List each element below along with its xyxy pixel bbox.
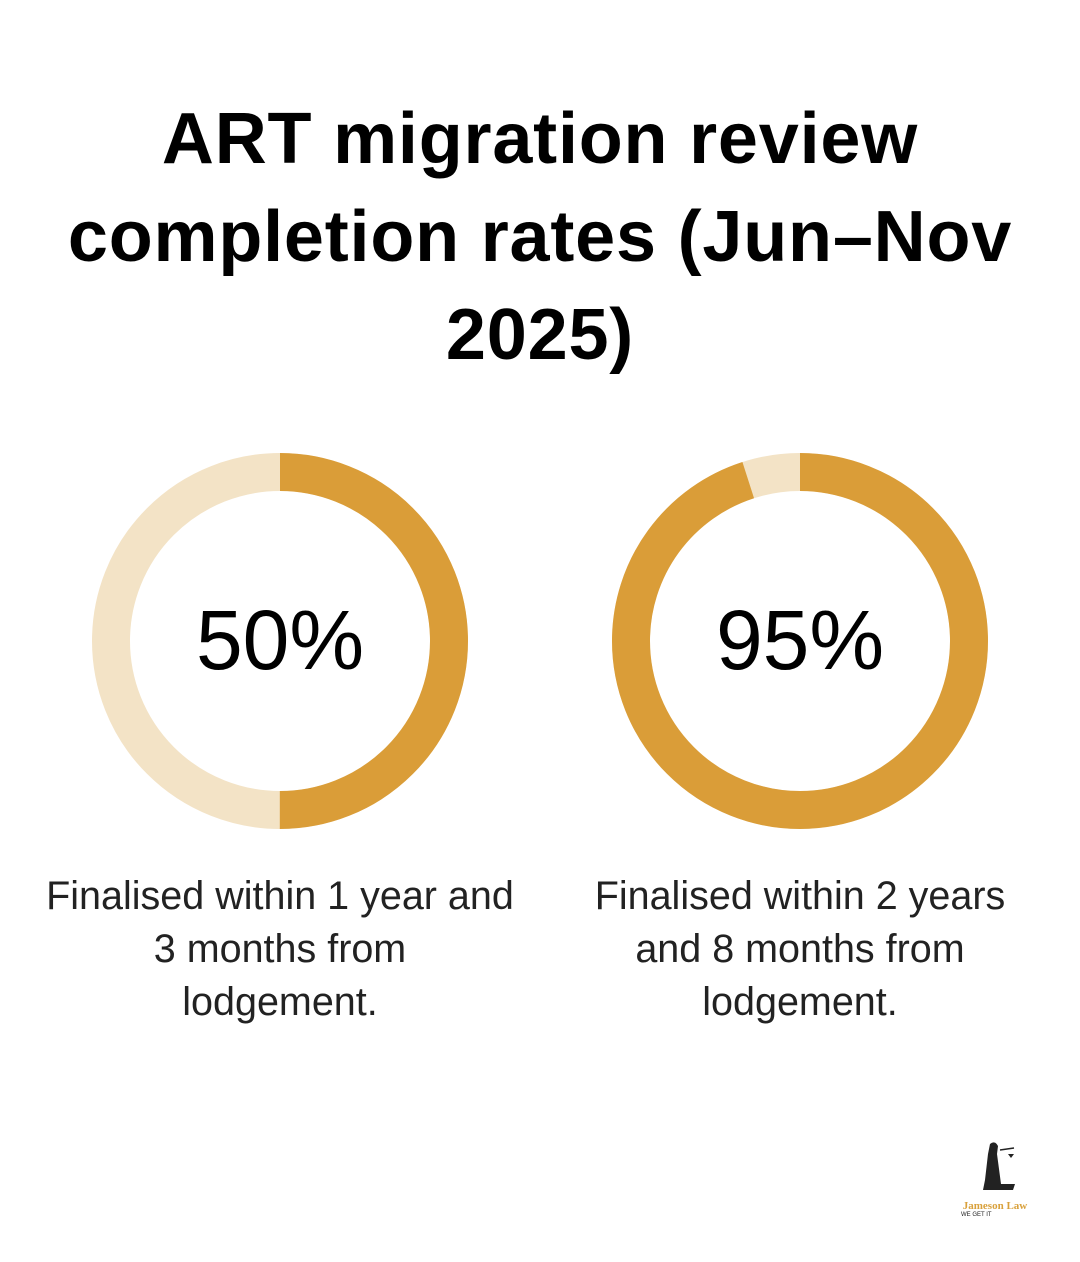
caption: 95%: and 8 months from	[635, 927, 965, 971]
logo: Jameson Law	[961, 1142, 1028, 1218]
caption: 95%: Finalised within 2 years	[595, 874, 1005, 918]
title: ART migration review	[162, 99, 918, 179]
donut chart: 95%: 95%	[716, 593, 884, 687]
title: completion rates (Jun–Nov	[68, 197, 1012, 277]
title	[68, 99, 1012, 375]
donut chart: 95%	[612, 453, 988, 829]
caption: 50%: 3 months from	[154, 927, 406, 971]
logo: Jameson Law: WE GET IT	[961, 1212, 992, 1218]
logo: Jameson Law: Jameson Law	[963, 1200, 1027, 1212]
caption: 50%: lodgement.	[182, 980, 378, 1024]
caption: 95%	[595, 874, 1005, 1024]
donut chart: 50%: 50%	[196, 593, 364, 687]
caption: 50%	[46, 874, 514, 1024]
donut chart: 50%	[92, 453, 468, 829]
caption: 50%: Finalised within 1 year and	[46, 874, 514, 918]
title: 2025)	[446, 295, 634, 375]
caption: 95%: lodgement.	[702, 980, 898, 1024]
